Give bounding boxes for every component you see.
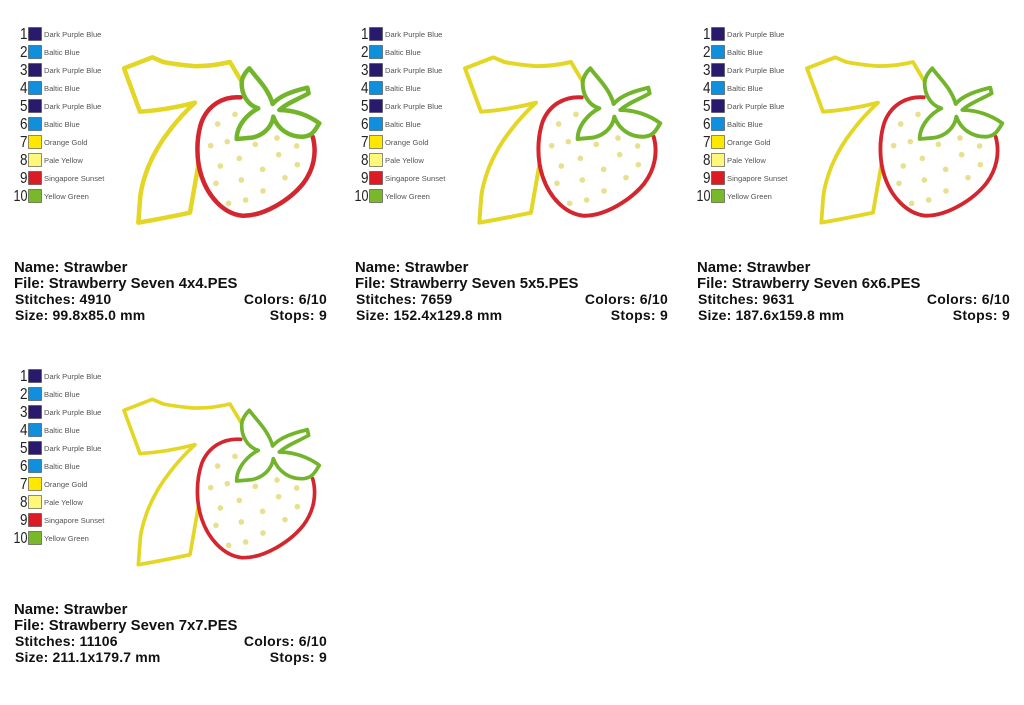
design details 7x7: Colors: 6/10 bbox=[244, 633, 327, 649]
design details 5x5: Size: 152.4x129.8 mm bbox=[356, 307, 502, 323]
design details 7x7: Stitches: 11106 bbox=[15, 633, 118, 649]
embroidery design 4x4 bbox=[124, 57, 319, 223]
panel: Strawberry Seven 4x4 bbox=[14, 26, 327, 323]
design details 5x5: Stitches: 7659 bbox=[356, 291, 452, 307]
design details 4x4: File: Strawberry Seven 4x4.PES bbox=[14, 276, 238, 292]
design details 6x6: Stitches: 9631 bbox=[698, 291, 794, 307]
design details 7x7: Size: 211.1x179.7 mm bbox=[15, 649, 160, 665]
panel: Strawberry Seven 5x5 bbox=[354, 26, 668, 323]
design details 6x6: Name: Strawber bbox=[697, 260, 811, 276]
design details 7x7: Name: Strawber bbox=[14, 602, 128, 618]
design details 5x5: Colors: 6/10 bbox=[585, 291, 668, 307]
design details 5x5 bbox=[355, 260, 668, 323]
color legend 4x4 bbox=[14, 26, 105, 205]
embroidery design 5x5 bbox=[465, 57, 660, 223]
design details 4x4: Name: Strawber bbox=[14, 260, 128, 276]
design details 7x7: Stops: 9 bbox=[270, 649, 327, 665]
color legend 5x5 bbox=[354, 26, 446, 205]
design details 4x4 bbox=[14, 260, 327, 323]
design details 6x6 bbox=[697, 260, 1010, 323]
design details 4x4: Size: 99.8x85.0 mm bbox=[15, 307, 145, 323]
embroidery design 7x7 bbox=[124, 399, 319, 565]
design details 5x5: Name: Strawber bbox=[355, 260, 469, 276]
color legend 7x7 bbox=[14, 368, 105, 547]
color legend 6x6 bbox=[696, 26, 788, 205]
design details 7x7: File: Strawberry Seven 7x7.PES bbox=[14, 618, 238, 634]
design details 6x6: Stops: 9 bbox=[953, 307, 1010, 323]
panel: Strawberry Seven 6x6 bbox=[696, 26, 1010, 323]
design details 4x4: Stops: 9 bbox=[270, 307, 327, 323]
embroidery design 6x6 bbox=[807, 57, 1002, 223]
design details 6x6: File: Strawberry Seven 6x6.PES bbox=[697, 276, 921, 292]
design details 6x6: Size: 187.6x159.8 mm bbox=[698, 307, 844, 323]
design details 5x5: Stops: 9 bbox=[611, 307, 668, 323]
design details 7x7 bbox=[14, 602, 327, 665]
panel: Strawberry Seven 7x7 bbox=[14, 368, 327, 665]
design details 6x6: Colors: 6/10 bbox=[927, 291, 1010, 307]
design details 4x4: Stitches: 4910 bbox=[15, 291, 111, 307]
design details 5x5: File: Strawberry Seven 5x5.PES bbox=[355, 276, 579, 292]
design details 4x4: Colors: 6/10 bbox=[244, 291, 327, 307]
